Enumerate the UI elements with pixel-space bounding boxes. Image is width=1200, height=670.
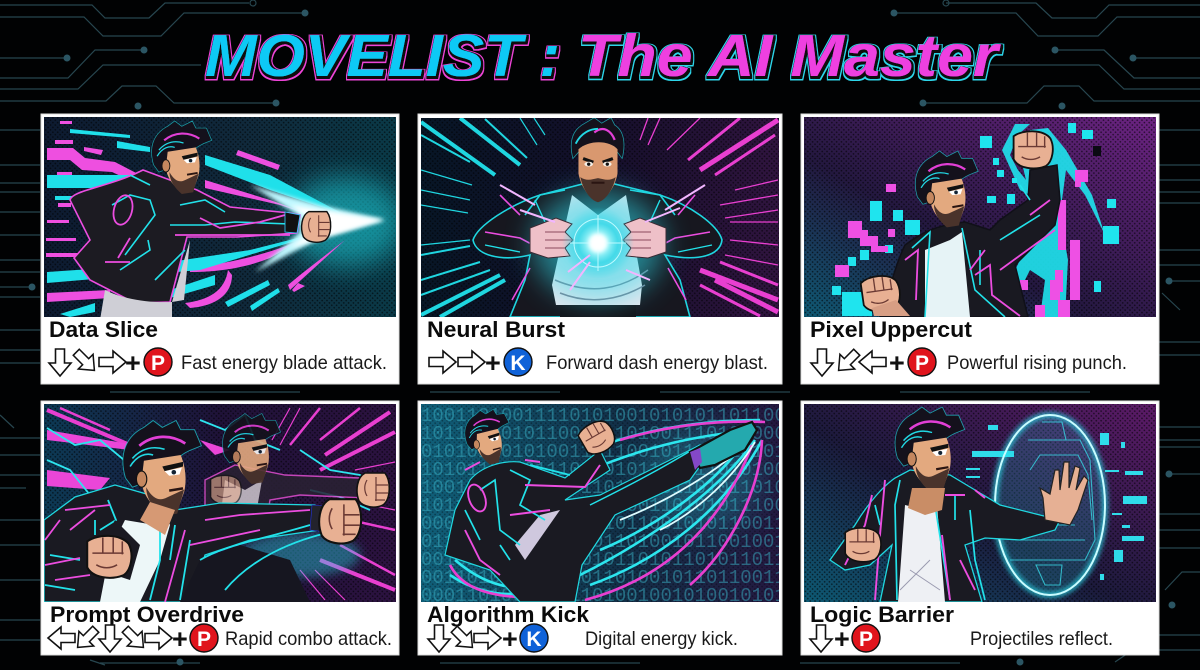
- binary rain background: 01010110101001101100101110110101010: [421, 441, 820, 463]
- command input: +: [502, 624, 518, 654]
- title: [205, 23, 1001, 89]
- command input: P: [151, 352, 165, 375]
- command input: [810, 624, 880, 654]
- binary rain background: [422, 408, 779, 601]
- move description: Projectiles reflect.: [970, 628, 1113, 650]
- panel: Logic Barrier: [801, 401, 1159, 655]
- command input: +: [172, 624, 188, 654]
- command input: K: [510, 352, 526, 375]
- binary rain background: 00110101101001011010010110110011011: [421, 567, 820, 589]
- move description: Rapid combo attack.: [225, 628, 392, 650]
- command input: [49, 345, 172, 378]
- binary rain background: 10110101001011010100110101011100101: [421, 495, 820, 517]
- binary rain background: 10011010011110101001010101101100011: [421, 405, 820, 427]
- illustration: punch with energy blade: [44, 117, 405, 320]
- move description: Digital energy kick.: [585, 628, 738, 650]
- panel: Pixel Uppercut: [801, 114, 1159, 384]
- command input: P: [197, 628, 211, 651]
- move name: Pixel Uppercut: [810, 317, 972, 342]
- command input: +: [125, 348, 141, 378]
- panel: Prompt Overdrive: [41, 401, 399, 655]
- binary rain background: 10110100101100101101001110101000111: [421, 423, 820, 445]
- panel: Data Slice: [41, 114, 405, 384]
- illustration: double punch combo: [44, 404, 396, 602]
- command input: [811, 345, 936, 378]
- binary rain background: 00011010010101101001001010010101111: [421, 585, 820, 607]
- move name: Neural Burst: [427, 317, 565, 342]
- move name: Prompt Overdrive: [50, 602, 244, 627]
- move name: Logic Barrier: [810, 602, 954, 627]
- command input: [428, 622, 548, 655]
- command input: +: [485, 348, 501, 378]
- binary rain background: 10101100101110100101101011010100111: [421, 459, 820, 481]
- command input: K: [526, 628, 542, 651]
- panel: Algorithm Kick: [418, 401, 820, 655]
- move name: Algorithm Kick: [427, 602, 589, 627]
- move description: Powerful rising punch.: [947, 352, 1127, 374]
- command input: [48, 622, 218, 655]
- binary rain background: 01101011010010101101001011001001101: [421, 531, 820, 553]
- command input: +: [889, 348, 905, 378]
- command input: [429, 348, 532, 378]
- command input: +: [834, 624, 850, 654]
- panel: Neural Burst: [418, 114, 782, 384]
- binary rain background: 00101101001011010110101101011011010: [421, 549, 820, 571]
- move name: Data Slice: [49, 317, 158, 342]
- move description: Forward dash energy blast.: [546, 352, 768, 374]
- illustration: high kick over binary: [421, 404, 779, 602]
- binary rain background: 10011010110010110100101101011010111: [421, 477, 820, 499]
- move description: Fast energy blade attack.: [181, 352, 387, 374]
- illustration: holographic shield: [804, 404, 1156, 602]
- command input: P: [859, 628, 873, 651]
- binary rain background: 00010110100101101011001010110011110: [421, 513, 820, 535]
- illustration: energy orb blast: [421, 118, 779, 317]
- title: The AI Master: [578, 23, 1001, 89]
- command input: P: [915, 352, 929, 375]
- illustration: rising punch with pixels: [804, 117, 1156, 317]
- title: MOVELIST :: [205, 23, 560, 89]
